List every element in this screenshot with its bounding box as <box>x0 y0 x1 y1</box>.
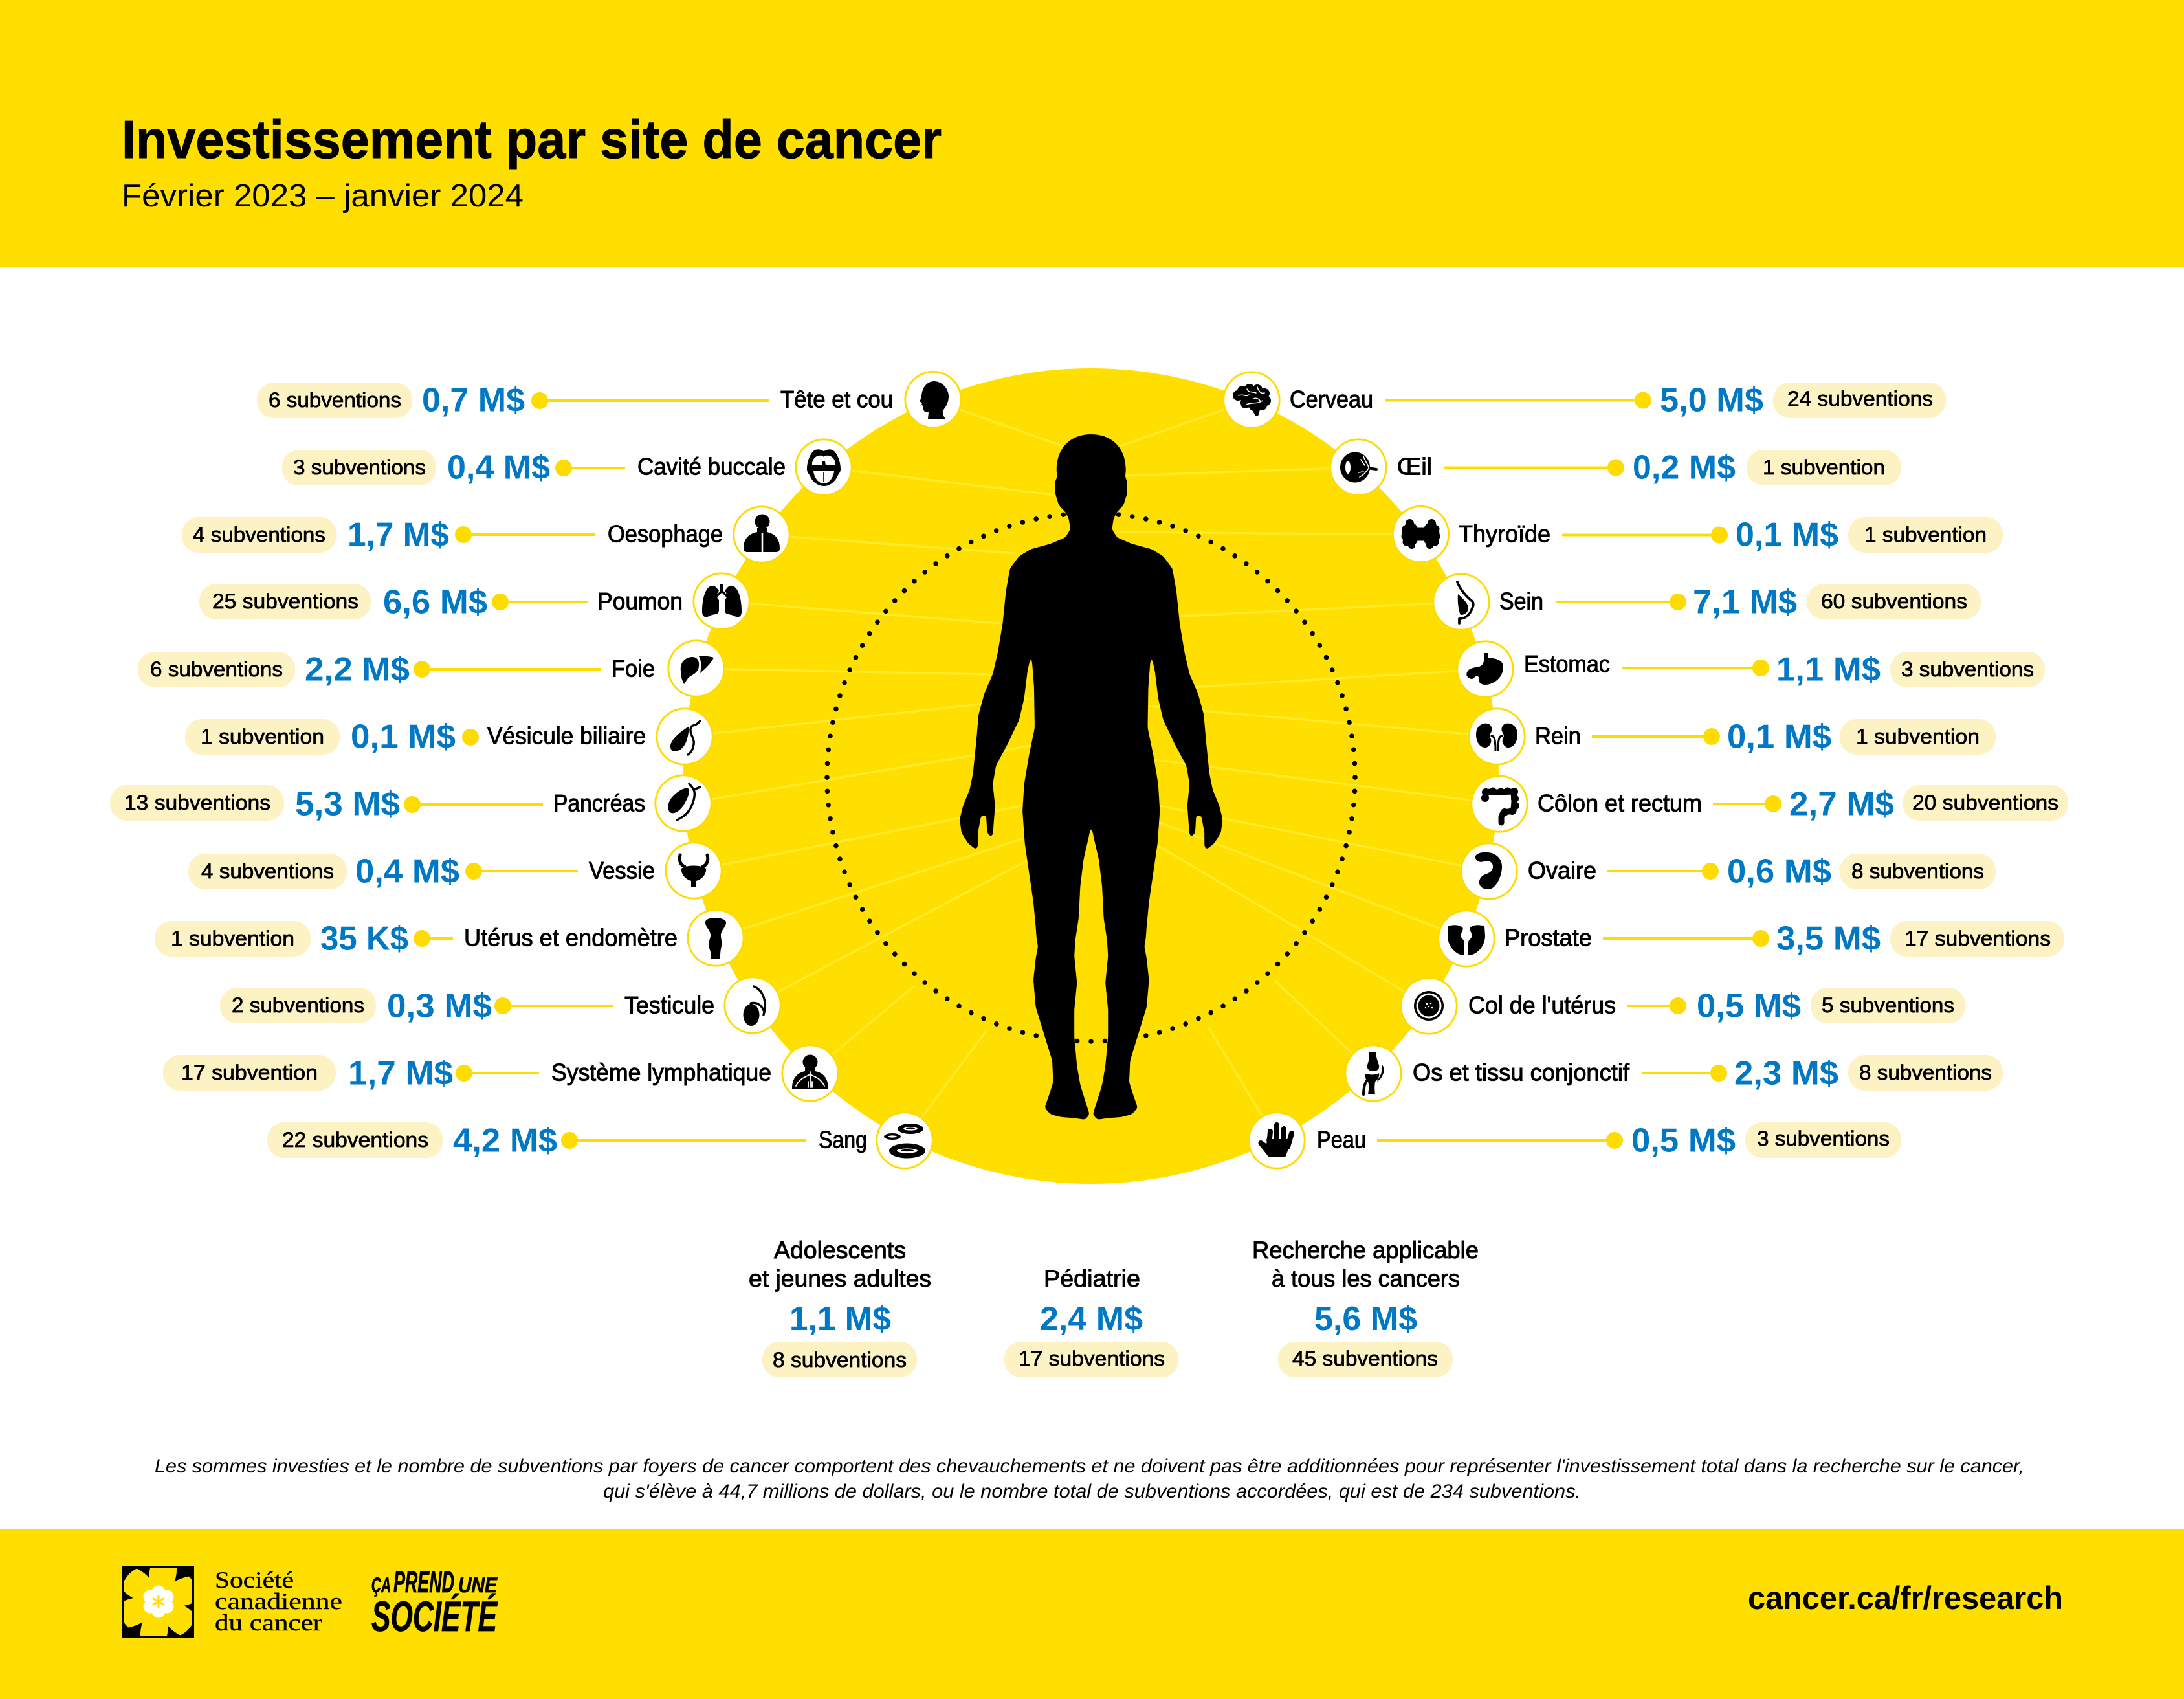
label: Vessie <box>589 857 655 884</box>
amount: 0,5 M$ <box>1631 1122 1736 1160</box>
connector <box>494 997 613 1014</box>
left row: Poumon <box>199 573 749 629</box>
amount: 6,6 M$ <box>383 584 487 621</box>
icon: lungs <box>694 573 749 629</box>
grants pill <box>138 652 295 687</box>
connector <box>1377 1132 1623 1149</box>
label: Rein <box>1535 722 1581 750</box>
connector <box>555 460 625 476</box>
grants pill: 25 subventions <box>212 590 358 613</box>
grants pill <box>267 1122 443 1158</box>
connector <box>414 661 601 678</box>
connector <box>492 594 588 610</box>
label: Poumon <box>597 588 683 615</box>
website url: cancer.ca/fr/research <box>1748 1580 2063 1616</box>
label: Pancréas <box>553 790 645 817</box>
heading <box>749 1237 931 1292</box>
grants pill: 1 subvention <box>201 725 324 748</box>
icon: stomach <box>1457 641 1513 697</box>
connector <box>1556 594 1686 610</box>
right row: Ovaire <box>1461 843 1996 899</box>
connector <box>1385 392 1651 409</box>
connector <box>1607 863 1719 880</box>
label: Thyroïde <box>1459 520 1550 548</box>
icon: cervix <box>1401 978 1457 1034</box>
icon: knee bone <box>1345 1045 1401 1101</box>
grants pill <box>182 517 336 553</box>
grants pill <box>1811 988 1965 1023</box>
radiating rays from icons to the body <box>683 400 1499 1140</box>
grants pill: 17 subventions <box>1904 927 2051 950</box>
grants pill <box>163 1055 336 1091</box>
icon: thyroid <box>1393 506 1449 562</box>
grants pill: 3 subventions <box>1901 658 2034 681</box>
label: Oesophage <box>608 520 723 548</box>
connector <box>465 863 578 880</box>
connector <box>1622 660 1769 676</box>
label: Cavité buccale <box>637 453 786 480</box>
amount: 7,1 M$ <box>1693 584 1797 621</box>
connector <box>1444 460 1624 476</box>
amount: 0,6 M$ <box>1727 853 1831 891</box>
connector <box>561 1132 806 1149</box>
slogan: Ça prend une société: PREND <box>393 1565 454 1599</box>
connector <box>456 1065 539 1082</box>
grants pill: 8 subventions <box>1859 1061 1992 1084</box>
icon: gallbladder <box>657 709 712 764</box>
icon: pancreas <box>656 775 711 831</box>
icon: prostate <box>1439 911 1494 966</box>
right row: Os et tissu conjonctif <box>1345 1045 2003 1101</box>
amount: 5,0 M$ <box>1660 382 1763 419</box>
amount: 1,1 M$ <box>789 1300 891 1338</box>
amount: 0,4 M$ <box>447 449 550 487</box>
grants pill <box>1890 921 2064 957</box>
dotted circle <box>827 513 1355 1041</box>
heading: Recherche applicable <box>1252 1237 1479 1263</box>
left row: Foie <box>138 641 724 696</box>
label: Système lymphatique <box>551 1059 771 1086</box>
heading: Adolescents <box>774 1237 906 1263</box>
connector <box>1713 795 1781 812</box>
title: Investissement par site de cancer <box>122 109 942 170</box>
grants pill: 17 subventions <box>1019 1347 1165 1370</box>
grants pill <box>1747 450 1901 485</box>
left row: Vésicule biliaire <box>185 709 712 764</box>
right row: Œil <box>1330 439 1901 495</box>
amount: 2,3 M$ <box>1734 1055 1838 1093</box>
left row: Oesophage <box>182 507 789 562</box>
label: Œil <box>1397 453 1432 480</box>
left row: Cavité buccale <box>282 439 852 495</box>
grants pill: 22 subventions <box>282 1128 428 1151</box>
grants pill: 6 subventions <box>150 658 283 681</box>
heading <box>1252 1237 1479 1292</box>
amount: 1,7 M$ <box>347 516 449 554</box>
footer band <box>0 1529 2184 1699</box>
grants pill <box>188 854 347 889</box>
summary: Pédiatrie <box>1004 1265 1178 1377</box>
grants pill <box>257 383 412 418</box>
amount: 0,2 M$ <box>1633 449 1736 487</box>
label: Vésicule biliaire <box>487 722 646 750</box>
grants pill <box>1890 652 2045 687</box>
grants pill <box>1840 719 1996 755</box>
right row: Côlon et rectum <box>1472 776 2068 832</box>
amount: 0,1 M$ <box>1727 718 1831 756</box>
grants pill <box>185 719 340 755</box>
icon: esophagus bust <box>734 507 789 562</box>
label: Tête et cou <box>780 386 893 413</box>
summary: Recherche applicable à tous les cancers <box>1252 1237 1479 1377</box>
icon: kidneys <box>1469 709 1525 764</box>
grants pill: 20 subventions <box>1912 791 2058 814</box>
connector <box>1642 1065 1727 1082</box>
label: Cerveau <box>1290 386 1373 413</box>
connector <box>1592 728 1720 745</box>
grants pill: 4 subventions <box>193 523 325 546</box>
icon: hand <box>1249 1113 1305 1168</box>
connector <box>1627 997 1686 1014</box>
amount: 35 K$ <box>320 920 408 958</box>
logo: daffodil <box>122 1566 194 1638</box>
icon: mouth <box>796 439 852 495</box>
slogan: Ça prend une société: ÇA <box>371 1573 391 1597</box>
amount: 0,3 M$ <box>387 988 492 1025</box>
human body silhouette <box>960 434 1222 1120</box>
icon: brain <box>1224 372 1279 428</box>
grants pill <box>1848 517 2003 553</box>
left row: Sang <box>267 1113 932 1168</box>
dot <box>462 729 479 746</box>
label: Col de l'utérus <box>1468 992 1616 1019</box>
grants pill <box>110 785 284 821</box>
grants pill <box>1840 854 1996 889</box>
left row: Testicule <box>220 977 780 1033</box>
grants pill <box>1745 1122 1901 1158</box>
left row: Utérus et endomètre <box>155 910 744 966</box>
logo text: Société canadienne du cancer: Société <box>215 1567 294 1593</box>
grants pill: 3 subventions <box>293 456 426 479</box>
icon: ovary <box>1461 843 1517 899</box>
grants pill: 8 subventions <box>1851 860 1984 883</box>
label: Sein <box>1499 588 1543 615</box>
grants pill <box>220 988 376 1023</box>
right row: Prostate <box>1439 911 2064 966</box>
header band <box>0 0 2184 267</box>
grants pill: 5 subventions <box>1822 994 1954 1017</box>
amount: 0,5 M$ <box>1697 988 1801 1025</box>
left row: Pancréas <box>110 775 711 831</box>
heading: Pédiatrie <box>1044 1265 1140 1292</box>
amount: 0,4 M$ <box>355 853 459 891</box>
right row: Cerveau <box>1224 372 1946 428</box>
grants pill <box>762 1342 917 1377</box>
grants pill: 2 subventions <box>232 994 364 1017</box>
left row: Vessie <box>188 843 722 898</box>
large yellow sun circle <box>683 368 1499 1184</box>
grants pill: 60 subventions <box>1821 590 1967 613</box>
label: Peau <box>1317 1126 1366 1153</box>
grants pill: 17 subvention <box>181 1061 318 1084</box>
amount: 3,5 M$ <box>1776 920 1881 958</box>
amount: 1,1 M$ <box>1776 651 1881 689</box>
amount: 0,7 M$ <box>422 382 525 419</box>
grants pill <box>1773 383 1946 418</box>
icon: eye <box>1330 439 1386 495</box>
grants pill <box>1848 1055 2003 1091</box>
amount: 2,4 M$ <box>1040 1300 1143 1338</box>
icon: breast <box>1433 574 1489 630</box>
icon: liver <box>668 641 724 696</box>
icon: lymphatic bust <box>782 1045 838 1101</box>
footnote <box>155 1456 2024 1502</box>
grants pill <box>1278 1342 1453 1377</box>
connector <box>1603 930 1769 947</box>
connector <box>1562 527 1728 544</box>
grants pill <box>199 584 371 619</box>
footnote: Les sommes investies et le nombre de subventions par foyers de cancer comportent des chevauchements et ne doivent pas être additionnées pour représenter l'investissement total dans la recherche sur le cancer, <box>155 1456 2024 1477</box>
icon: bladder <box>666 843 722 898</box>
grants pill <box>1004 1342 1178 1377</box>
grants pill: 24 subventions <box>1787 387 1933 410</box>
label: Sang <box>819 1126 867 1153</box>
amount: 1,7 M$ <box>348 1055 453 1093</box>
icon: head <box>905 372 961 428</box>
connector <box>404 796 543 813</box>
label: Utérus et endomètre <box>464 924 678 951</box>
slogan: Ça prend une société: SOCIÉTÉ <box>371 1592 498 1640</box>
icon: colon <box>1472 776 1527 832</box>
amount: 0,1 M$ <box>351 718 456 756</box>
icon: blood cells <box>877 1113 932 1168</box>
footnote: qui s'élève à 44,7 millions de dollars, ou le nombre total de subventions accordées, qui est de 234 subventions. <box>603 1481 1581 1502</box>
logo text: Société canadienne du cancer <box>215 1567 342 1636</box>
grants pill: 1 subvention <box>171 927 294 950</box>
connector <box>531 392 769 409</box>
label: Foie <box>612 655 655 682</box>
grants pill: 8 subventions <box>773 1348 907 1371</box>
label: Côlon et rectum <box>1538 790 1702 817</box>
label: Os et tissu conjonctif <box>1413 1059 1630 1086</box>
grants pill: 13 subventions <box>124 791 270 814</box>
right row: Rein <box>1469 709 1996 764</box>
grants pill <box>282 450 436 485</box>
amount: 5,6 M$ <box>1314 1300 1417 1338</box>
right row: Sein <box>1433 574 1981 630</box>
subtitle: Février 2023 – janvier 2024 <box>122 179 524 214</box>
grants pill <box>1903 785 2068 821</box>
label: Estomac <box>1524 651 1610 677</box>
summary: Adolescents et jeunes adultes <box>749 1237 931 1377</box>
grants pill: 1 subvention <box>1763 456 1885 479</box>
right row: Peau <box>1249 1113 1901 1168</box>
right row: Thyroïde <box>1393 506 2003 562</box>
slogan: Ça prend une société <box>371 1565 498 1640</box>
label: Ovaire <box>1528 857 1596 884</box>
grants pill: 6 subventions <box>269 388 401 412</box>
right row: Estomac <box>1457 641 2045 697</box>
amount: 0,1 M$ <box>1736 516 1838 554</box>
grants pill: 1 subvention <box>1856 725 1980 748</box>
right row: Col de l'utérus <box>1401 978 1965 1034</box>
connector <box>414 930 453 947</box>
amount: 5,3 M$ <box>295 786 400 823</box>
grants pill <box>1807 584 1981 619</box>
grants pill: 4 subventions <box>201 860 334 883</box>
label: Testicule <box>624 992 714 1019</box>
slogan: Ça prend une société: UNE <box>458 1573 498 1597</box>
left row: Système lymphatique <box>163 1045 838 1101</box>
heading: et jeunes adultes <box>749 1265 931 1292</box>
left row: Tête et cou <box>257 372 961 428</box>
icon: uterus <box>688 910 744 966</box>
logo text: Société canadienne du cancer: canadienne <box>215 1588 342 1614</box>
amount: 4,2 M$ <box>453 1122 557 1160</box>
grants pill: 45 subventions <box>1292 1347 1438 1370</box>
amount: 2,7 M$ <box>1789 786 1894 823</box>
connector <box>455 526 595 543</box>
logo text: Société canadienne du cancer: du cancer <box>215 1610 322 1636</box>
label: Prostate <box>1505 924 1592 951</box>
icon: testicle <box>725 977 780 1033</box>
amount: 2,2 M$ <box>305 651 410 689</box>
grants pill <box>155 921 311 957</box>
heading: à tous les cancers <box>1272 1265 1460 1292</box>
grants pill: 3 subventions <box>1757 1127 1890 1150</box>
grants pill: 1 subvention <box>1864 523 1987 546</box>
